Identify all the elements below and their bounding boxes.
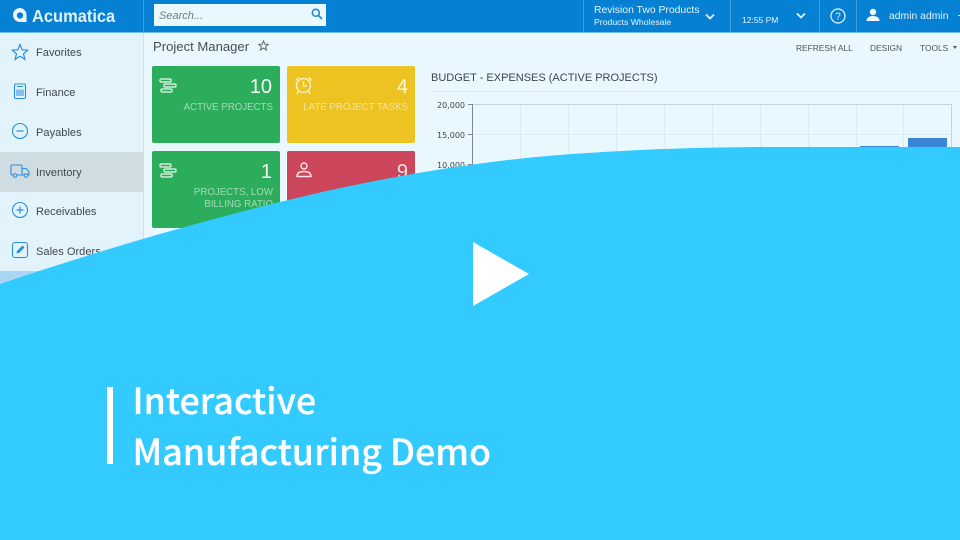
title text: Manufacturing Demo bbox=[132, 424, 491, 476]
branch selector: Revision Two Products bbox=[594, 4, 700, 16]
icon: truck bbox=[10, 164, 30, 178]
icon: plus circle bbox=[12, 202, 28, 218]
search box bbox=[154, 4, 326, 26]
y axis labels: 20,000 bbox=[437, 101, 465, 110]
tile: projects, low billing ratio: BILLING RATIO bbox=[204, 199, 273, 210]
icon: minus circle bbox=[12, 123, 28, 139]
menu item: Inventory: Inventory bbox=[36, 167, 82, 179]
title text: Interactive bbox=[132, 373, 316, 425]
tile: late project tasks: LATE PROJECT TASKS bbox=[303, 102, 408, 113]
active row: Inventory bbox=[0, 152, 143, 192]
page heading: Project Manager: Project Manager bbox=[153, 39, 249, 54]
menu item: Favorites bbox=[10, 43, 82, 60]
title text bbox=[132, 373, 491, 476]
logo: Acumatica: Acumatica bbox=[32, 6, 115, 26]
icon: gantt bbox=[159, 78, 177, 93]
tile: active projects bbox=[152, 66, 280, 143]
tile: late project tasks: 4 bbox=[397, 76, 408, 98]
icon: play button bbox=[473, 242, 529, 306]
menu item: Receivables bbox=[12, 202, 96, 218]
toolbar actions: TOOLS bbox=[920, 43, 948, 53]
branch selector bbox=[594, 4, 715, 26]
sidebar bbox=[0, 33, 144, 540]
highlighted row bbox=[0, 271, 143, 311]
tile: projects, low billing ratio: PROJECTS, LOW bbox=[194, 187, 273, 198]
toolbar actions: DESIGN bbox=[870, 43, 902, 53]
user menu: admin admin bbox=[889, 11, 948, 22]
icon: alarm clock bbox=[295, 77, 312, 94]
title accent bar bbox=[107, 387, 113, 464]
menu item: Sales Orders bbox=[12, 242, 101, 258]
title block bbox=[107, 373, 491, 476]
y axis labels: 15,000 bbox=[437, 131, 465, 140]
branch selector: Products Wholesale bbox=[594, 16, 671, 26]
menu item: Receivables: Receivables bbox=[36, 206, 96, 218]
menu item: Finance bbox=[14, 84, 75, 99]
icon: person bbox=[296, 162, 312, 178]
menu item: Payables bbox=[12, 123, 82, 139]
menu item: Sales Orders: Sales Orders bbox=[36, 246, 101, 258]
toolbar actions bbox=[796, 43, 957, 53]
tile: projects, low billing ratio bbox=[152, 151, 280, 228]
icon: calculator bbox=[14, 84, 26, 99]
tile: active projects: ACTIVE PROJECTS bbox=[184, 102, 273, 113]
toolbar actions: REFRESH ALL bbox=[796, 43, 853, 53]
icon: help: ? bbox=[835, 12, 841, 22]
icon: star bbox=[10, 43, 30, 60]
tile: red metric: 9 bbox=[397, 161, 408, 183]
tile: late project tasks bbox=[287, 66, 415, 143]
chart heading: BUDGET - EXPENSES (ACTIVE PROJECTS) bbox=[431, 72, 658, 84]
icon: help bbox=[830, 8, 846, 24]
clock: 12:55 PM bbox=[742, 15, 778, 25]
bar chart: budget expenses bbox=[437, 101, 952, 170]
tile: projects, low billing ratio: 1 bbox=[261, 161, 272, 183]
menu item: Finance: Finance bbox=[36, 87, 75, 99]
clock bbox=[742, 12, 806, 25]
icon: chevron bbox=[705, 14, 715, 20]
menu item: Inventory bbox=[10, 164, 82, 179]
menu item: Favorites: Favorites bbox=[36, 47, 82, 59]
plot area bbox=[468, 104, 952, 165]
icon: gantt bbox=[159, 163, 177, 178]
menu item: Payables: Payables bbox=[36, 127, 82, 139]
icon: favorite star bbox=[258, 40, 270, 51]
chart heading bbox=[431, 71, 960, 92]
user menu bbox=[866, 8, 960, 22]
y axis labels bbox=[437, 101, 465, 170]
icon: chevron bbox=[796, 12, 806, 19]
top navigation bar bbox=[0, 0, 960, 33]
tile: active projects: 10 bbox=[250, 76, 272, 98]
icon: user bbox=[866, 8, 880, 21]
icon: pencil square bbox=[12, 242, 28, 258]
icon: search bbox=[312, 8, 322, 20]
y axis labels: 10,000 bbox=[437, 161, 465, 170]
tile: red metric bbox=[287, 151, 415, 228]
search box: Search... bbox=[159, 10, 203, 22]
